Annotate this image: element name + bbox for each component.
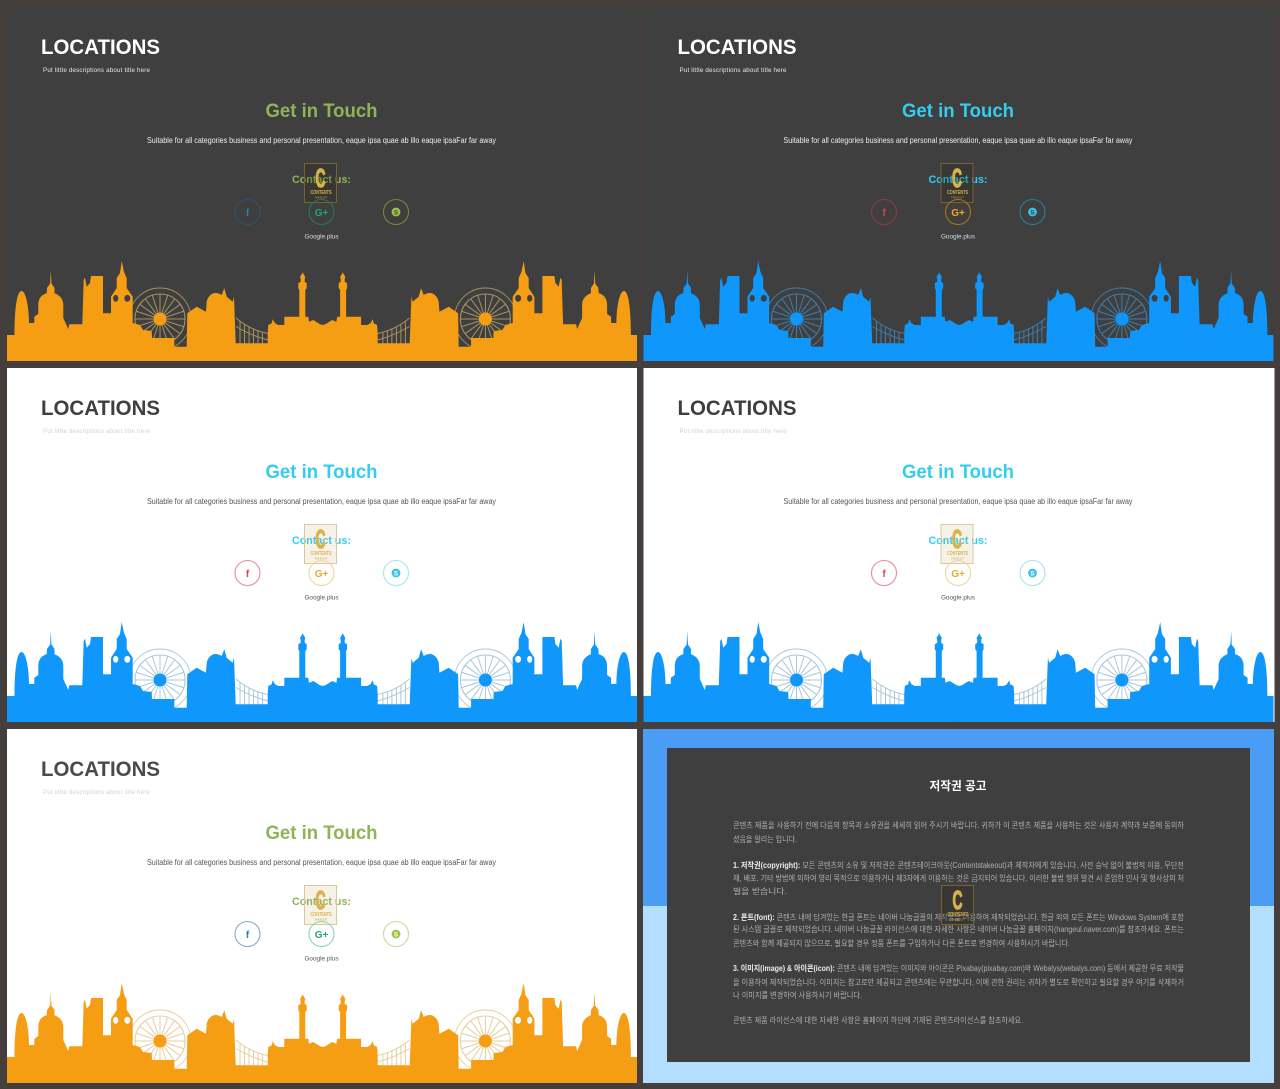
- notice section: copyright: 벌을 받습니다.: [733, 886, 787, 896]
- title: LOCATIONS: [41, 396, 160, 420]
- notice section: image and icon: 나 이미지를 변경하여 사용하시기 바랍니다.: [733, 990, 862, 1000]
- notice section: image and icon: 을 이용하여 제작되었습니다. 이미지는 참고로만 제공되고 콘텐츠에는 무관합니다. 이에 관한 권리는 귀하가 별도로 확인하고 필요할 경우 여기를 삭제하거: [733, 977, 1184, 987]
- slide background: [644, 368, 1274, 722]
- description: Suitable for all categories business and personal presentation, eaque ipsa quae ab illo eaque ipsaFar far away: [784, 497, 1132, 506]
- panel: white slide with orange skyline, green heading: [7, 729, 638, 1083]
- backdrop lower band: [643, 906, 1274, 1083]
- watermark badge: [304, 524, 336, 564]
- watermark badge: C: [316, 163, 326, 193]
- icon: facebook: [235, 560, 260, 586]
- subtitle: Put little descriptions about title here: [680, 67, 787, 74]
- icon caption: Google.plus: [304, 594, 339, 602]
- title: LOCATIONS: [41, 757, 160, 781]
- notice section: font: 2. 폰트(font): 콘텐츠 내에 담겨있는 한글 폰트는 네이버 나눔글꼴의 저작물을 이용하여 제작되었습니다. 한글 외의 모든 폰트는 Windows System에 포함: [733, 912, 1185, 922]
- notice intro: 셨음을 알리는 입니다.: [733, 834, 797, 844]
- watermark badge: TAKEOUT: [314, 918, 328, 922]
- icon: skype: S: [1030, 210, 1035, 216]
- description: Suitable for all categories business and personal presentation, eaque ipsa quae ab illo eaque ipsaFar far away: [147, 858, 496, 867]
- icon: skype: [384, 922, 408, 946]
- watermark badge: TAKEOUT: [951, 196, 964, 200]
- subtitle: Put little descriptions about title here: [680, 428, 787, 435]
- watermark badge: C: [952, 163, 962, 193]
- watermark badge: TAKEOUT: [314, 556, 328, 560]
- icon: google plus: [309, 200, 334, 224]
- icon: skype: S: [394, 210, 399, 216]
- watermark badge: [304, 885, 336, 924]
- heading: Get in Touch: [266, 101, 378, 122]
- icon: skype: [384, 560, 408, 586]
- notice section: image and icon: [733, 963, 1184, 1000]
- notice title: 저작권 공고: [930, 778, 986, 793]
- watermark badge: TAKEOUT: [314, 196, 328, 200]
- icon: google plus: G+: [315, 930, 328, 941]
- icon caption: Google.plus: [304, 234, 339, 240]
- heading: Get in Touch: [902, 101, 1014, 122]
- notice card: [667, 748, 1250, 1062]
- watermark badge: [304, 163, 336, 202]
- icon: facebook: f: [246, 930, 250, 941]
- icon: facebook: f: [246, 569, 250, 580]
- icon: skype: [384, 200, 408, 224]
- watermark badge: CONTENTS: [947, 190, 969, 196]
- notice section: copyright: 1. 저작권(copyright): 모든 콘텐츠의 소유 및 저작권은 콘텐츠테이크아웃(Contentstakeout)과 제작자에게 있습니다. 사전 승낙 없이 불법적 이용, 무단전: [733, 860, 1184, 870]
- icon: google plus: [946, 200, 970, 224]
- notice footer: 콘텐츠 제품 라이선스에 대한 자세한 사항은 홈페이지 하단에 기재된 콘텐츠라이선스를 참조하세요.: [733, 1015, 1023, 1025]
- contact label: Contact us:: [928, 174, 988, 186]
- watermark badge: [941, 524, 973, 564]
- watermark badge: CONTENTS: [948, 912, 969, 918]
- subtitle: Put little descriptions about title here: [43, 428, 151, 435]
- notice intro: 콘텐츠 제품을 사용하기 전에 다음의 항목과 소유권을 세세히 읽어 주시기 바랍니다. 귀하가 이 콘텐츠 제품을 사용하는 것은 사용자 계약과 보증에 동의하: [733, 820, 1185, 830]
- skyline: [7, 261, 638, 361]
- backdrop upper band: [643, 729, 1274, 906]
- panel: dark slide with orange skyline: [7, 8, 638, 361]
- icon: facebook: [872, 560, 896, 586]
- skyline: [644, 261, 1275, 361]
- icon: facebook: f: [882, 208, 886, 219]
- watermark badge: CONTENTS: [310, 551, 332, 557]
- notice section: copyright: 재, 배포, 기타 방법에 의하여 영리 목적으로 이용하거나 제3자에게 이용하는 것은 금지되어 있습니다. 이러한 불법 행위 발견 시 준엄한 민사 및 형사상의 처: [733, 873, 1184, 883]
- icon: facebook: [235, 922, 260, 946]
- heading: Get in Touch: [266, 823, 378, 844]
- title: LOCATIONS: [678, 35, 796, 59]
- skyline: [644, 622, 1275, 722]
- heading: Get in Touch: [266, 462, 378, 483]
- watermark badge: CONTENTS: [310, 912, 332, 918]
- watermark badge: CONTENTS: [947, 551, 969, 557]
- watermark badge: CONTENTS: [310, 190, 332, 196]
- contact label: Contact us:: [292, 896, 351, 908]
- icon caption: Google.plus: [941, 234, 975, 240]
- icon: skype: S: [1030, 570, 1035, 578]
- icon: facebook: f: [882, 569, 886, 580]
- slide background: [644, 8, 1274, 361]
- icon: facebook: f: [246, 208, 250, 219]
- watermark badge: [942, 885, 974, 924]
- icon: facebook: [872, 200, 896, 224]
- notice section: font: 콘텐츠와 함께 제공되지 않으므로, 필요할 경우 정품 폰트를 구입하거나 다른 폰트로 변경하여 사용하시기 바랍니다.: [733, 938, 1070, 948]
- icon: skype: S: [394, 570, 399, 578]
- icon: google plus: [309, 922, 334, 946]
- slide background: [7, 729, 637, 1083]
- contact label: Contact us:: [292, 174, 351, 186]
- title: LOCATIONS: [678, 396, 796, 420]
- icon: skype: [1020, 200, 1045, 224]
- notice section: copyright: [733, 860, 1184, 896]
- icon: google plus: [309, 560, 334, 586]
- icon: google plus: G+: [315, 569, 328, 580]
- subtitle: Put little descriptions about title here: [43, 67, 151, 74]
- contact label: Contact us:: [292, 535, 351, 547]
- icon: skype: [1020, 560, 1045, 586]
- watermark badge: TAKEOUT: [952, 918, 965, 922]
- icon: skype: S: [394, 932, 399, 938]
- contact label: Contact us:: [928, 535, 988, 547]
- watermark badge: C: [316, 885, 326, 915]
- skyline: [7, 983, 638, 1083]
- watermark badge: C: [952, 885, 963, 915]
- notice section: font: 된 시스템 글꼴로 제작되었습니다. 네이버 나눔글꼴 라이선스에 대한 자세한 사항은 네이버 나눔글꼴 홈페이지(hangeul.naver.com)를 참조하세요. 폰트는: [733, 924, 1184, 934]
- icon: facebook: [235, 200, 260, 224]
- heading: Get in Touch: [902, 462, 1014, 483]
- icon caption: Google.plus: [304, 956, 339, 962]
- watermark badge: TAKEOUT: [951, 556, 964, 560]
- panel: white slide with blue skyline, cyan heading, second variant: [644, 368, 1275, 722]
- description: Suitable for all categories business and personal presentation, eaque ipsa quae ab illo eaque ipsaFar far away: [147, 136, 496, 145]
- panel: white slide with blue skyline, cyan heading: [7, 368, 638, 722]
- title: LOCATIONS: [41, 35, 160, 59]
- icon: google plus: [946, 560, 970, 586]
- skyline: [7, 622, 638, 722]
- icon: google plus: G+: [951, 569, 965, 580]
- slide background: [7, 368, 637, 722]
- notice section: font: [733, 912, 1185, 948]
- watermark badge: C: [952, 524, 962, 554]
- description: Suitable for all categories business and personal presentation, eaque ipsa quae ab illo eaque ipsaFar far away: [784, 136, 1132, 145]
- icon caption: Google.plus: [941, 594, 975, 602]
- subtitle: Put little descriptions about title here: [43, 789, 151, 796]
- watermark badge: C: [316, 524, 326, 554]
- icon: google plus: G+: [951, 208, 965, 219]
- slide background: [7, 8, 637, 361]
- notice section: image and icon: 3. 이미지(image) & 아이콘(icon): 콘텐츠 내에 담겨있는 이미지와 아이콘은 Pixabay(pixabay.com)와 Webalys(webalys.com) 등에서 제공한 무료 저작물: [733, 963, 1184, 973]
- watermark badge: [941, 163, 973, 202]
- icon: google plus: G+: [315, 208, 328, 219]
- panel: copyright notice: [643, 729, 1274, 1083]
- panel: dark slide with blue skyline: [644, 8, 1275, 361]
- description: Suitable for all categories business and personal presentation, eaque ipsa quae ab illo eaque ipsaFar far away: [147, 497, 496, 506]
- notice intro: [733, 820, 1185, 844]
